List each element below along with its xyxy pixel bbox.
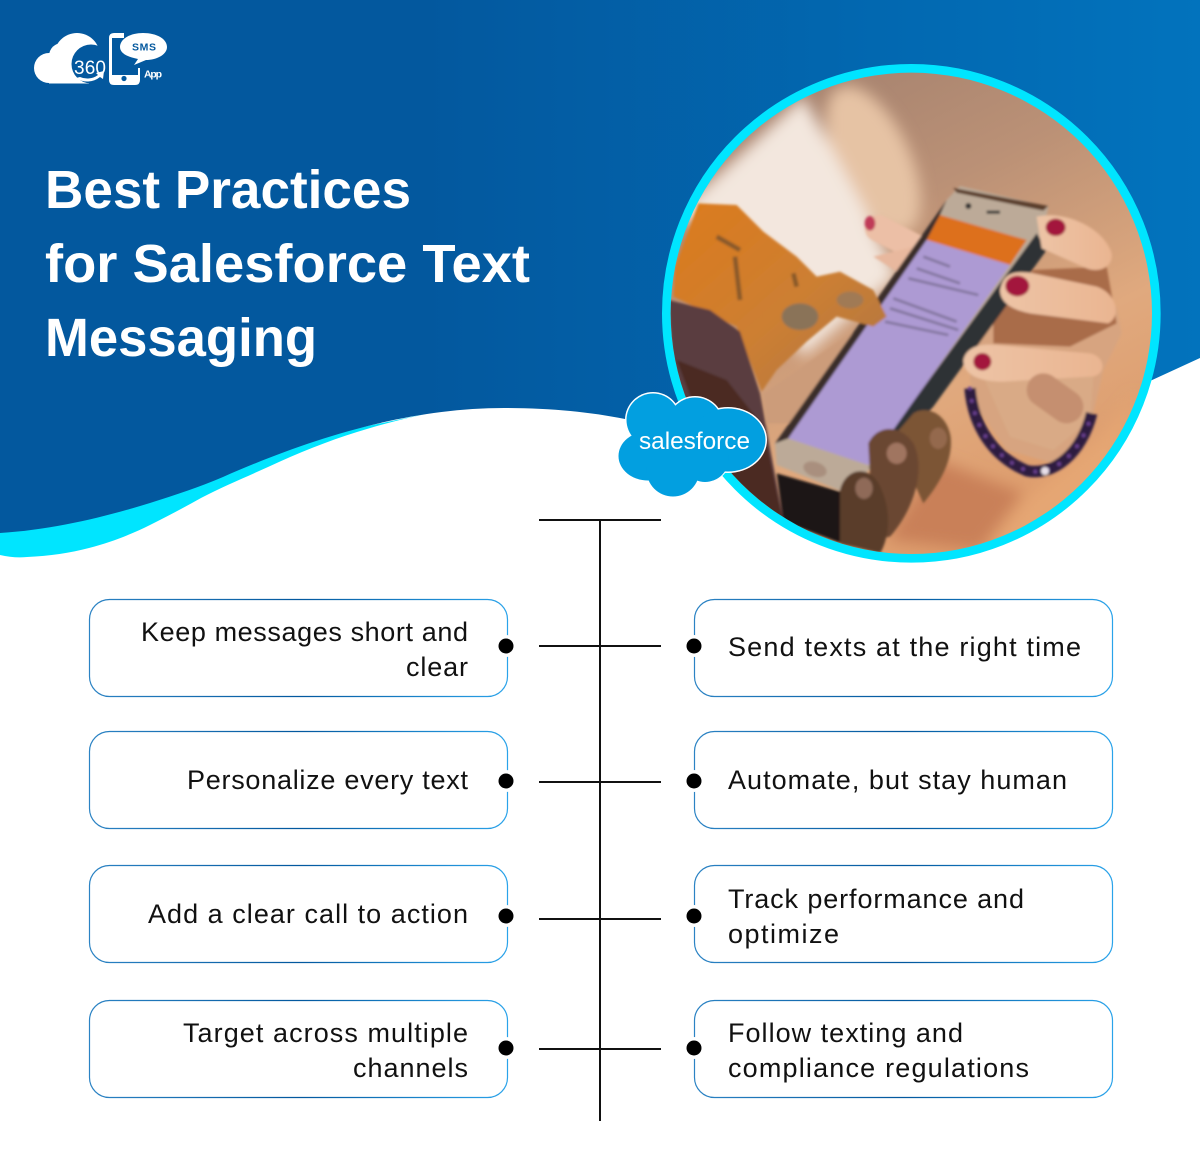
left hand	[673, 203, 887, 392]
finger behind phone	[878, 228, 920, 250]
cloud fill	[618, 394, 766, 496]
left card: Keep messages short and clear: clear	[406, 652, 468, 682]
thumb of left hand	[763, 327, 863, 423]
icon: SMS bubble	[120, 33, 167, 65]
left card: Add a clear call to action	[90, 866, 517, 962]
logo text App: App	[144, 68, 162, 80]
blue header shape	[0, 0, 1200, 533]
bottom fingers	[893, 410, 951, 503]
right card: Follow texting and compliance regulations: compliance regulations	[728, 1053, 1029, 1083]
title: Messaging	[45, 308, 317, 368]
right card: Track performance and optimize	[683, 866, 1112, 962]
phone	[775, 186, 1048, 493]
left card: Target across multiple channels: channels	[353, 1053, 468, 1083]
left card: Target across multiple channels	[90, 1000, 517, 1098]
salesforce logo	[617, 392, 767, 498]
right card: Send texts at the right time	[683, 600, 1112, 696]
right card: Track performance and optimize: optimize	[728, 919, 839, 949]
timeline axis and connectors	[539, 520, 661, 1121]
sleeve	[668, 300, 783, 520]
title: for Salesforce Text	[45, 234, 530, 294]
right card: Track performance and optimize: Track performance and	[728, 884, 1024, 914]
icon: phone	[109, 33, 140, 85]
right card: Follow texting and compliance regulations: Follow texting and	[728, 1018, 963, 1048]
cyan wave accent	[0, 411, 440, 557]
header wave background	[0, 0, 1200, 557]
right fingers	[1037, 215, 1112, 270]
icon: cloud	[34, 33, 100, 84]
left card: Target across multiple channels: Target across multiple	[183, 1018, 468, 1048]
right card: Follow texting and compliance regulations	[683, 1000, 1112, 1098]
right card: Send texts at the right time: Send texts at the right time	[728, 632, 1081, 662]
cloud outline	[617, 392, 767, 498]
left card: Keep messages short and clear: Keep messages short and	[141, 617, 468, 647]
left card: Personalize every text: Personalize every text	[187, 765, 468, 795]
left card: Keep messages short and clear	[90, 600, 517, 696]
bracelet	[970, 388, 1092, 472]
title: Best Practices	[45, 160, 411, 220]
photo: hands holding a phone	[660, 60, 1170, 570]
left card: Personalize every text	[90, 732, 517, 828]
right palm	[970, 324, 1120, 464]
left card: Add a clear call to action: Add a clear call to action	[148, 899, 468, 929]
right card: Automate, but stay human	[683, 732, 1112, 828]
logo text 360: 360	[74, 58, 106, 79]
title	[45, 160, 530, 368]
salesforce wordmark: salesforce	[639, 428, 750, 455]
logo: 360 SMS App	[34, 33, 167, 86]
logo text SMS: SMS	[132, 42, 156, 54]
right card: Automate, but stay human: Automate, but stay human	[728, 765, 1067, 795]
